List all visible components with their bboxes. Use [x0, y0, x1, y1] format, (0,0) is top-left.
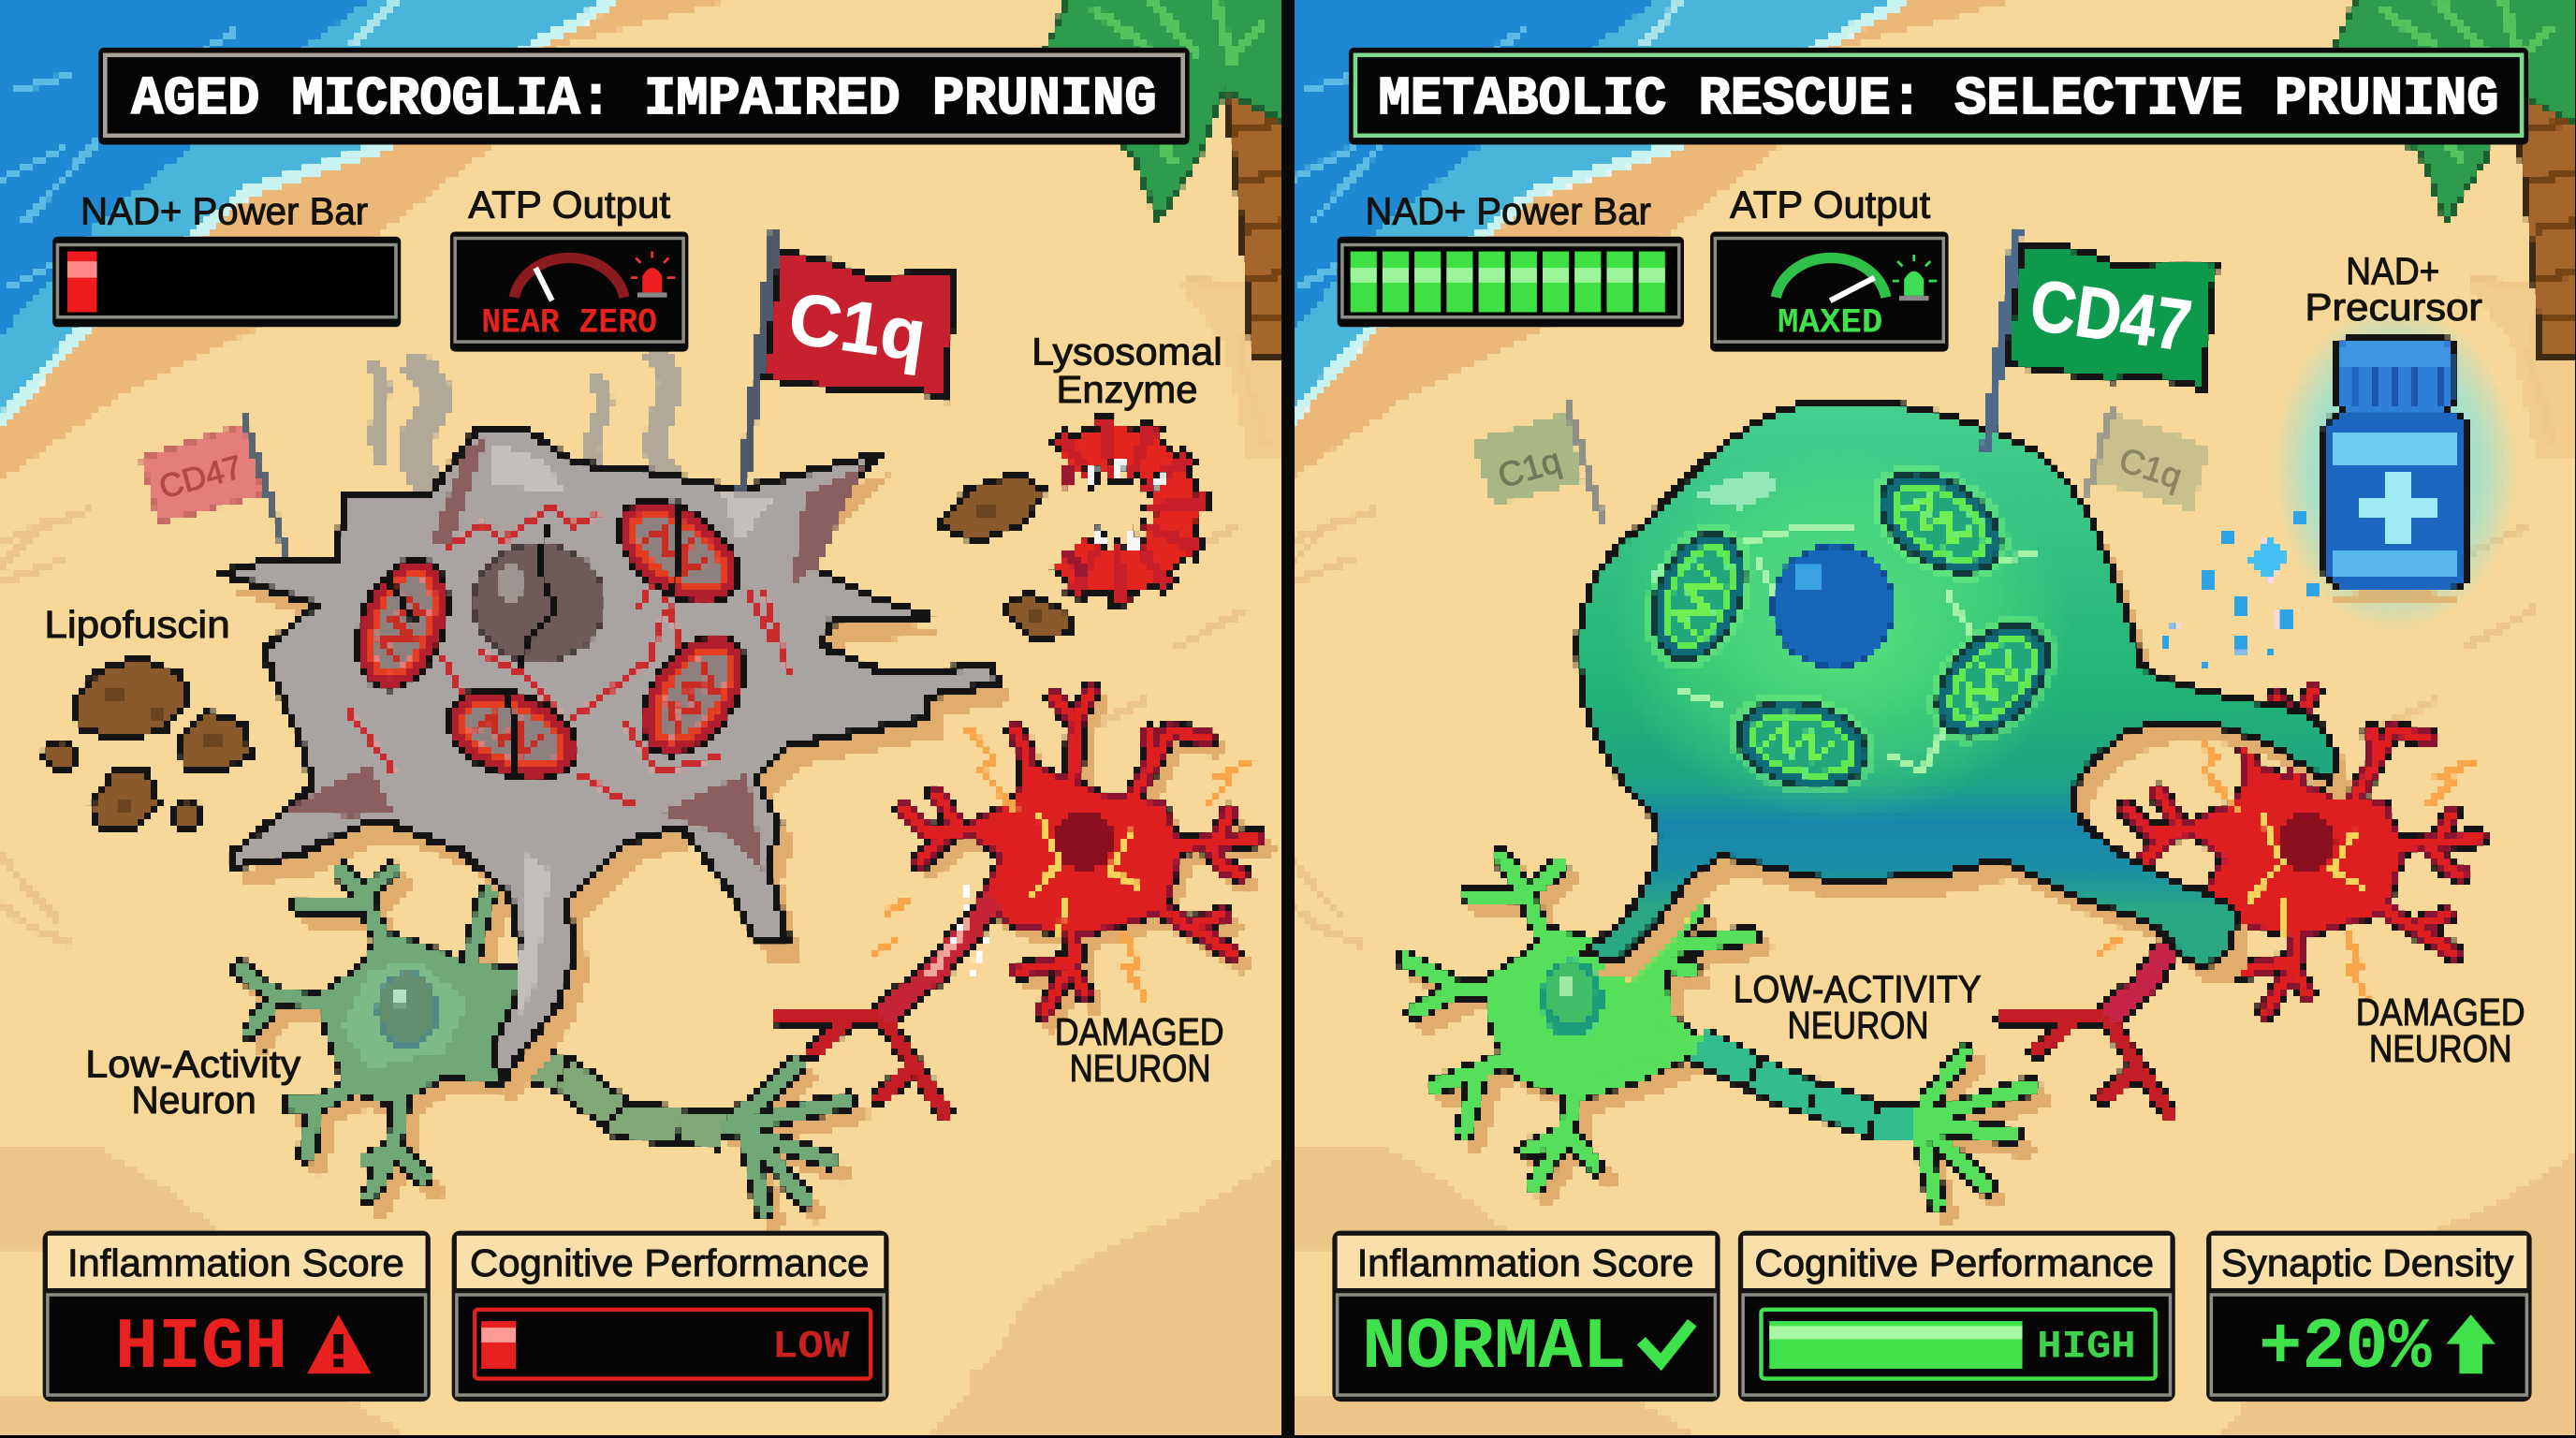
neuron: low-activity left [242, 871, 859, 1223]
flag: CD47 [1986, 227, 2217, 452]
panel: synaptic density: Synaptic Density [2221, 1241, 2514, 1284]
background: beach left [0, 0, 1301, 1438]
label: CD47 faded flag: CD47 [155, 448, 246, 506]
flag: C1q [742, 231, 956, 490]
label: CD47 flag: CD47 [2026, 265, 2196, 367]
flag: faded C1q right [2085, 406, 2211, 511]
flag: faded C1q left [1472, 403, 1603, 526]
panel: inflammation left [43, 1231, 431, 1401]
title: right [1349, 48, 2528, 144]
ATP gauge right: MAXED [1778, 304, 1882, 344]
panel: inflammation right: NORMAL [1362, 1308, 1627, 1389]
icon: NAD+ precursor bottle [2272, 304, 2519, 633]
label: low-activity neuron left: Low-Activity [85, 1042, 301, 1085]
ATP gauge left [450, 183, 688, 352]
panel: cognitive right [1738, 1231, 2175, 1401]
lipofuscin deposits [44, 473, 1071, 829]
label: faded C1q left: C1q [1494, 441, 1565, 495]
panel: inflammation left: Inflammation Score [67, 1241, 404, 1284]
label: low-activity neuron right: NEURON [1788, 1004, 1928, 1047]
label: damaged neuron left: DAMAGED [1055, 1010, 1224, 1053]
label: lysosomal enzyme [1032, 330, 1222, 411]
microglia: rescued green cell [1578, 401, 2349, 986]
damaged neuron left [781, 690, 1266, 1112]
label: damaged neuron right [2356, 990, 2525, 1070]
ATP gauge left: ATP Output [468, 183, 670, 227]
NAD particles [2163, 509, 2318, 670]
NAD bar right: NAD+ Power Bar [1365, 190, 1651, 233]
ATP gauge left: NEAR ZERO [481, 304, 657, 344]
label: low-activity neuron right: LOW-ACTIVITY [1734, 968, 1982, 1011]
label: damaged neuron left: NEURON [1070, 1047, 1211, 1090]
panel: cognitive left [452, 1231, 889, 1401]
panel: inflammation right [1332, 1231, 1720, 1401]
label: low-activity neuron left [85, 1042, 301, 1122]
panel: inflammation right: Inflammation Score [1357, 1241, 1694, 1284]
panel: cognitive left: LOW [772, 1325, 850, 1370]
label: NAD+ precursor: Precursor [2305, 286, 2482, 329]
flag: faded CD47 [141, 414, 287, 557]
panel: cognitive left: Cognitive Performance [470, 1241, 869, 1284]
icon: lysosomal enzyme [1064, 448, 1177, 575]
title: left [98, 48, 1190, 144]
NAD bar left [52, 190, 401, 327]
microglia: aged grey cell [222, 429, 1012, 1101]
damaged neuron axon right [2004, 936, 2175, 1112]
panel: synaptic density: +20% [2259, 1308, 2432, 1389]
smoke [374, 359, 675, 575]
panel: cognitive right: Cognitive Performance [1754, 1241, 2154, 1284]
label: NAD+ precursor [2305, 250, 2482, 329]
label: C1q flag: C1q [784, 278, 930, 376]
label: low-activity neuron right [1734, 968, 1982, 1047]
label: faded C1q right: C1q [2115, 440, 2187, 496]
label: lysosomal enzyme: Enzyme [1057, 368, 1197, 411]
ATP gauge right: ATP Output [1730, 183, 1930, 227]
neuron: low-activity right (healthy) [1406, 856, 2042, 1216]
label: NAD+ precursor: NAD+ [2346, 250, 2439, 293]
label: damaged neuron right: NEURON [2369, 1027, 2512, 1070]
label: lysosomal enzyme: Lysosomal [1032, 330, 1222, 374]
damaged neuron right [2098, 690, 2479, 1012]
label: damaged neuron right: DAMAGED [2356, 990, 2525, 1034]
NAD bar right [1338, 190, 1684, 327]
ATP gauge right [1710, 183, 1949, 352]
panel: cognitive right: HIGH [2037, 1325, 2136, 1370]
label: damaged neuron left [1055, 1010, 1224, 1090]
panel: inflammation left: HIGH [115, 1308, 287, 1389]
NAD bar left: NAD+ Power Bar [80, 190, 368, 233]
title: left: AGED MICROGLIA: IMPAIRED PRUNING [131, 70, 1157, 130]
background: beach right [1288, 0, 2576, 1438]
label: low-activity neuron left: Neuron [131, 1078, 256, 1122]
panel: synaptic density [2206, 1231, 2532, 1401]
divider [1281, 0, 1295, 1438]
title: right: METABOLIC RESCUE: SELECTIVE PRUNING [1379, 70, 2499, 130]
label: lipofuscin: Lipofuscin [44, 603, 230, 646]
